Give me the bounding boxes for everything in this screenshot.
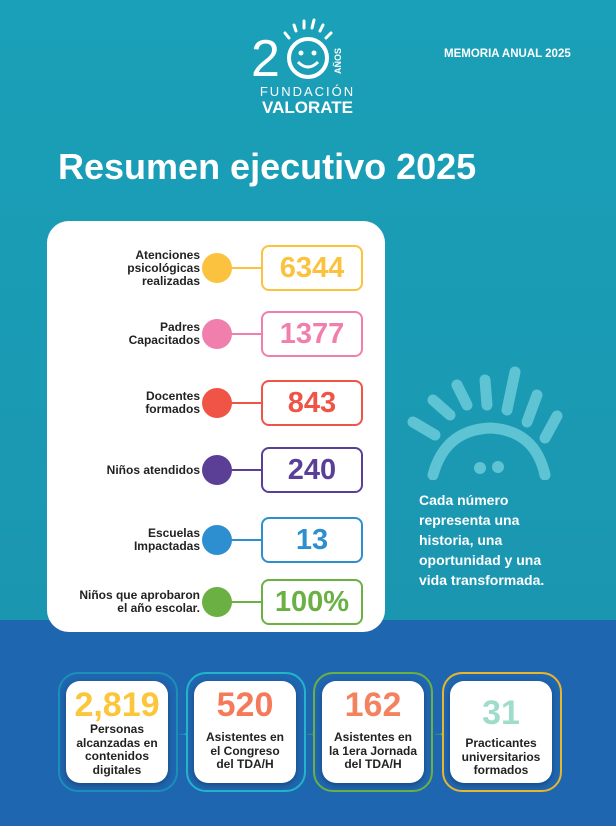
panel: bottom stats: Asistentes en [334,730,412,744]
stat: aprobaron: 100% [275,586,349,618]
stat: docentes: Docentes [146,389,200,403]
quote text: representa una [419,512,519,528]
stat: niños [107,447,363,493]
panel: bottom stats: del TDA/H [216,757,274,771]
stat card: 520 [186,672,306,792]
stat: aprobaron [79,579,363,625]
stat: padres: Padres [160,320,200,334]
icon: sun face [408,366,562,480]
stat: escuelas: Impactadas [134,539,200,553]
panel: bottom stats: Asistentes en [206,730,284,744]
stat: aprobaron: Niños que aprobaron [79,588,200,602]
arrow 2: → [305,725,317,739]
stat card: 2819 [58,672,178,792]
stat: atenciones: psicológicas [127,260,200,274]
arrow 3: → [433,725,445,739]
quote text: oportunidad y una [419,552,541,568]
panel: key stats [47,221,385,632]
logo [251,18,355,117]
stat: padres: 1377 [280,318,344,350]
panel: bottom stats: Personas [90,722,144,736]
stat: docentes: 843 [288,386,336,418]
panel: bottom stats: 162 [345,686,401,724]
panel: bottom stats: el Congreso [210,744,280,758]
stat: atenciones: realizadas [142,274,200,288]
stat: docentes [145,380,363,426]
panel: bottom stats [58,672,562,792]
stat card: 31 [442,672,562,792]
stat: atenciones: Atenciones [135,248,200,262]
quote text: historia, una [419,532,502,548]
panel: bottom stats: 520 [217,686,273,724]
panel: bottom stats: 31 [482,694,520,732]
panel: bottom stats: digitales [93,762,141,776]
arrow 1: → [177,725,189,739]
logo: AÑOS [333,48,343,74]
stat: niños: 240 [288,454,336,486]
stat: escuelas: 13 [296,524,328,556]
stat: padres [129,311,363,357]
quote text: vida transformada. [419,572,544,588]
stat: niños: Niños atendidos [107,462,200,476]
stat: docentes: formados [145,402,200,416]
title: Resumen ejecutivo 2025 [58,146,476,187]
logo: VALORATE [262,98,353,117]
logo: FUNDACIÓN [260,84,355,99]
stat: padres: Capacitados [129,333,200,347]
quote text [419,492,544,588]
stat: escuelas [134,517,363,563]
quote text: Cada número [419,492,508,508]
stat: aprobaron: el año escolar. [117,601,200,615]
panel: bottom stats: Practicantes [465,736,537,750]
panel: bottom stats: contenidos [85,749,149,763]
panel: bottom stats: alcanzadas en [76,736,158,750]
panel: bottom stats: 2,819 [74,686,160,724]
header label: MEMORIA ANUAL 2025 [444,48,571,60]
panel: bottom stats: universitarios [462,750,540,764]
stat: atenciones: 6344 [280,252,344,284]
panel: bottom stats: la 1era Jornada [329,744,417,758]
panel: bottom stats: formados [474,763,528,777]
panel: bottom stats: del TDA/H [344,757,402,771]
stat card: 162 [313,672,433,792]
stat: escuelas: Escuelas [148,526,200,540]
stat: atenciones [127,245,363,291]
